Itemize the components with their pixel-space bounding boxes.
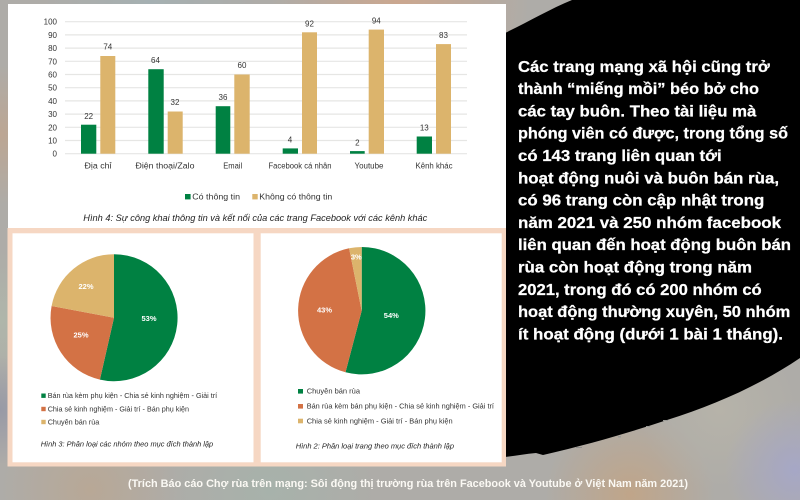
legend: nhóm: Chia sẻ kinh nghiệm - Giải trí - Bán phụ kiện [48, 404, 189, 414]
grid lines and y axis labels: 60 [48, 70, 58, 80]
data labels [84, 16, 448, 148]
data labels: 74 [103, 42, 113, 52]
text block: main paragraph: có 96 trang còn cập nhật trong [518, 193, 764, 210]
text block: main paragraph: liên quan đến hoạt động buôn bán [518, 237, 791, 254]
legend: nhóm: Bán rùa kèm phụ kiện - Chia sẻ kinh nghiệm - Giải trí [48, 391, 218, 400]
grid lines and y axis labels: 40 [48, 97, 58, 106]
caption: hình 4: Hình 4: Sự công khai thông tin và kết nối của các trang Facebook với các kênh khác [83, 213, 428, 223]
text block: main paragraph: thành “miếng mồi” béo bở cho [518, 81, 759, 98]
data labels: 64 [151, 56, 160, 65]
grid lines and y axis labels: 80 [48, 44, 58, 53]
grid lines and y axis labels: 0 [53, 150, 58, 159]
pie: trang theo mục đích: 43% [317, 306, 332, 314]
legend: trang: Bán rùa kèm bán phụ kiện - Chia sẻ kinh nghiệm - Giải trí [307, 402, 495, 411]
data labels: 92 [305, 20, 314, 28]
data labels: 83 [439, 31, 448, 40]
data labels: 60 [238, 61, 247, 70]
grid lines and y axis labels: 70 [48, 57, 58, 66]
pie: nhóm theo mục đích: 25% [73, 330, 89, 340]
data labels: 22 [84, 112, 94, 121]
text block: main paragraph: các tay buôn. Theo tài liệu mà [518, 103, 756, 120]
pie: trang theo mục đích: 3% [351, 252, 362, 262]
legend: nhóm [41, 391, 218, 427]
category labels [84, 162, 452, 170]
legend: nhóm: Chuyên bán rùa [48, 418, 100, 427]
text block: main paragraph: rùa còn hoạt động trong năm [518, 260, 752, 276]
panel: bar chart [8, 4, 506, 228]
grid lines and y axis labels: 20 [48, 123, 58, 132]
caption: hình 2: Hình 2: Phân loại trang theo mục đích thành lập [296, 442, 454, 451]
text block: main paragraph: hoạt động thường xuyên, 50 nhóm [518, 304, 790, 321]
text block: main paragraph: Các trang mạng xã hội cũng trở [518, 59, 770, 76]
bars: không có thông tin [100, 30, 451, 154]
data labels: 2 [355, 138, 360, 148]
black curved backdrop [505, 0, 800, 457]
caption: hình 3: Hình 3: Phân loại các nhóm theo mục đích thành lập [41, 439, 213, 448]
category labels: Điện thoại/Zalo [136, 162, 195, 170]
text block: main paragraph: ít hoạt động (dưới 1 bài 1 tháng). [518, 326, 783, 343]
category labels: Email [223, 162, 242, 170]
grid lines and y axis labels: 90 [48, 31, 58, 40]
bar chart legend: Không có thông tin [259, 193, 332, 202]
pie: nhóm theo mục đích: 22% [78, 282, 94, 291]
data labels: 94 [372, 16, 381, 26]
category labels: Youtube [354, 162, 384, 170]
legend: trang: Chia sẻ kinh nghiệm - Giải trí - Bán phụ kiện [307, 416, 453, 425]
text block: main paragraph: có 143 trang liên quan tới [518, 148, 722, 165]
text block: main paragraph: 2021, trong đó có 200 nhóm có [518, 282, 762, 299]
panel: page pie chart [261, 233, 502, 462]
source note: (Trích Báo cáo Chợ rùa trên mạng: Sôi động thị trường rùa trên Facebook và Youtube ở Việt Nam năm 2021) [128, 478, 688, 490]
pie: nhóm theo mục đích [51, 254, 178, 381]
category labels: Địa chỉ [84, 162, 112, 170]
text block: main paragraph: năm 2021 và 250 nhóm facebook [518, 215, 781, 232]
bars: có thông tin [81, 69, 432, 154]
grid lines and y axis labels: 50 [48, 84, 58, 93]
legend: trang: Chuyên bán rùa [307, 387, 361, 396]
grid lines and y axis labels: 30 [48, 110, 58, 119]
data labels: 4 [288, 136, 293, 144]
text block: main paragraph [518, 59, 791, 343]
bar chart legend [185, 193, 332, 202]
pie: trang theo mục đích: 54% [384, 311, 399, 320]
grid lines and y axis labels: 10 [48, 136, 58, 146]
bar chart legend: Có thông tin [192, 193, 240, 202]
pie: trang theo mục đích [298, 247, 425, 374]
category labels: Kênh khác [416, 162, 452, 170]
legend: trang [298, 387, 495, 425]
panel: group pie chart [12, 233, 254, 462]
grid lines and y axis labels: 100 [44, 18, 58, 27]
grid lines and y axis labels [44, 18, 467, 159]
data labels: 32 [171, 98, 180, 107]
data labels: 13 [420, 124, 429, 132]
data labels: 36 [219, 93, 228, 102]
text block: main paragraph: phóng viên có được, trong tổng số [518, 125, 788, 143]
text block: main paragraph: hoạt động nuôi và buôn bán rùa, [518, 170, 779, 187]
panel: peach frame [8, 228, 506, 466]
category labels: Facebook cá nhân [268, 162, 332, 170]
pie: nhóm theo mục đích: 53% [141, 314, 157, 323]
